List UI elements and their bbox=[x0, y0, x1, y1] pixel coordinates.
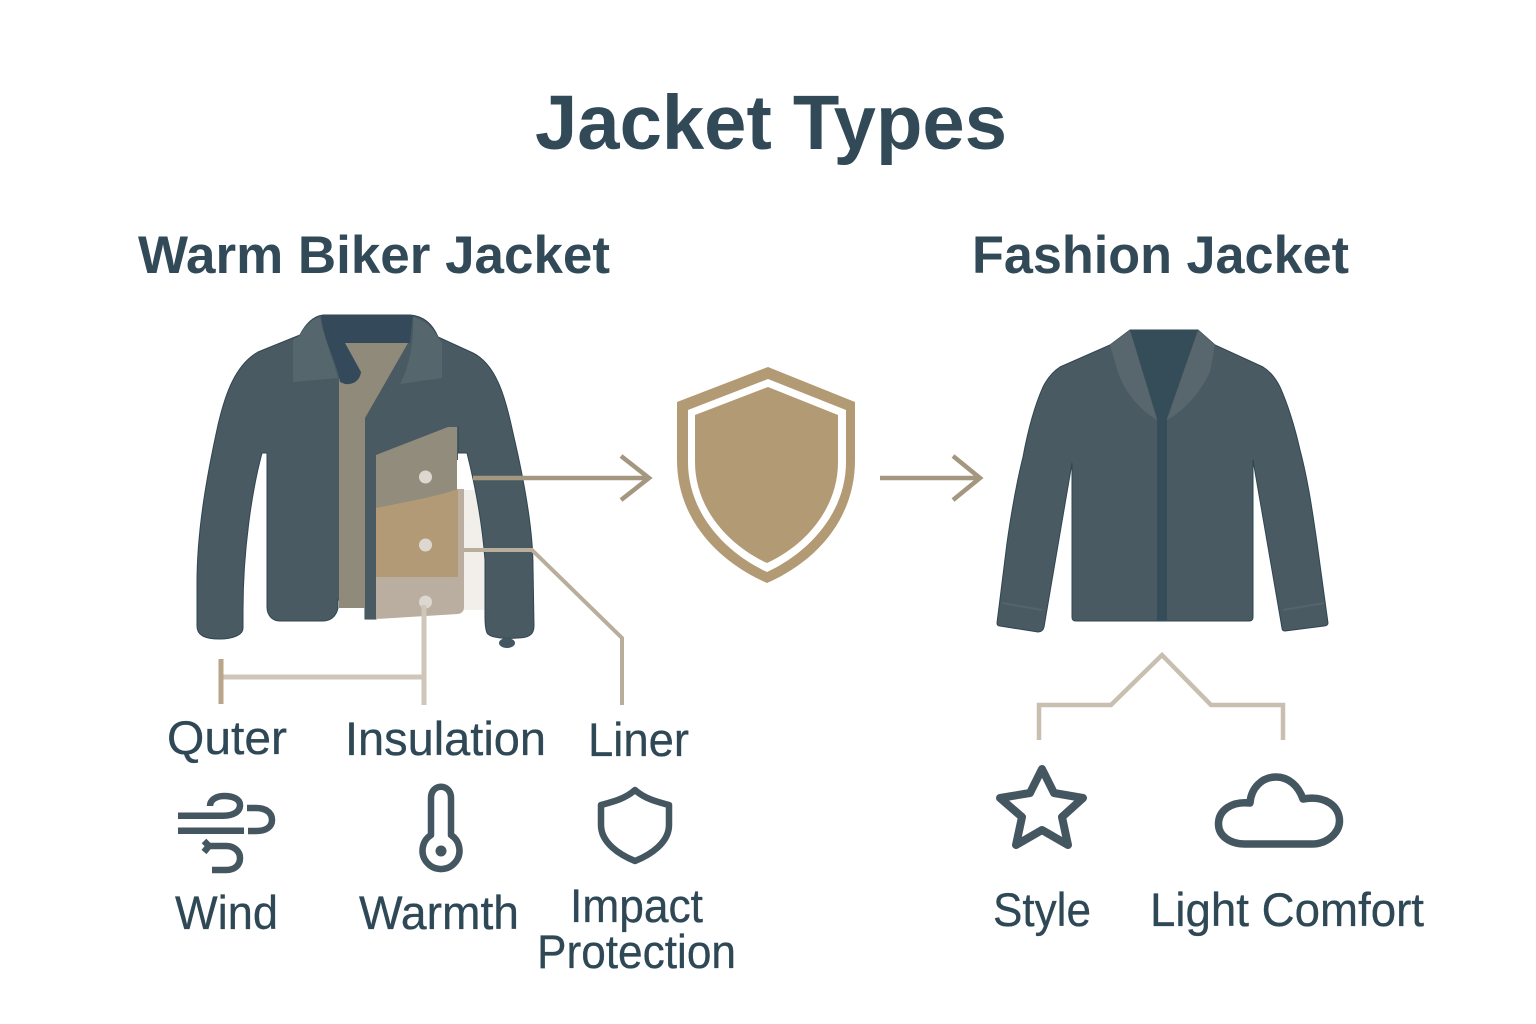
label: wind: Wind bbox=[175, 886, 278, 939]
icon: star bbox=[1000, 769, 1083, 845]
connector: outer bbox=[221, 605, 424, 705]
label: outer: Quter bbox=[167, 711, 287, 764]
shawl collar left bbox=[1110, 330, 1157, 420]
jacket right front bbox=[365, 345, 458, 619]
collar left bbox=[293, 317, 338, 382]
arrow: biker jacket to shield bbox=[473, 456, 649, 500]
label: liner: Liner bbox=[588, 713, 689, 766]
icon: cloud bbox=[1218, 777, 1340, 844]
cuff stitching bbox=[1002, 603, 1324, 610]
label: impact protection bbox=[537, 879, 736, 978]
arrow: shield to fashion jacket bbox=[880, 456, 980, 500]
label: light comfort: Light Comfort bbox=[1150, 883, 1424, 936]
icon: small shield bbox=[601, 790, 669, 861]
right front overlap bbox=[365, 355, 458, 619]
collar right bbox=[400, 317, 442, 384]
layer: insulation bbox=[376, 489, 458, 577]
faint shadow beside layers bbox=[463, 490, 487, 610]
layer: liner bbox=[376, 489, 464, 619]
icon: central shield bbox=[677, 367, 855, 583]
collar inside dark bbox=[321, 315, 413, 384]
connector: insulation bbox=[464, 550, 622, 705]
illustration: fashion jacket bbox=[997, 330, 1328, 632]
label: impact protection: Protection bbox=[537, 925, 736, 978]
title: Jacket Types bbox=[535, 80, 1007, 166]
label: style: Style bbox=[993, 883, 1091, 936]
icon: thermometer bbox=[423, 787, 460, 869]
neck opening and placket bbox=[1130, 330, 1198, 621]
jacket silhouette bbox=[997, 330, 1328, 632]
heading: warm biker jacket: Warm Biker Jacket bbox=[138, 226, 610, 285]
jacket body bbox=[197, 315, 534, 639]
connector: fashion benefits bbox=[1039, 655, 1283, 740]
label: warmth: Warmth bbox=[359, 886, 519, 939]
inner lining placket bbox=[339, 343, 408, 608]
label: insulation: Insulation bbox=[345, 712, 546, 765]
cuff button bbox=[499, 638, 515, 648]
label: impact protection: Impact bbox=[570, 879, 703, 932]
layer dots bbox=[419, 470, 432, 608]
heading: fashion jacket: Fashion Jacket bbox=[972, 226, 1349, 285]
illustration: warm biker jacket bbox=[197, 315, 534, 648]
layer: outer bbox=[376, 427, 457, 515]
icon: wind bbox=[178, 796, 272, 870]
shawl collar right bbox=[1167, 330, 1215, 420]
